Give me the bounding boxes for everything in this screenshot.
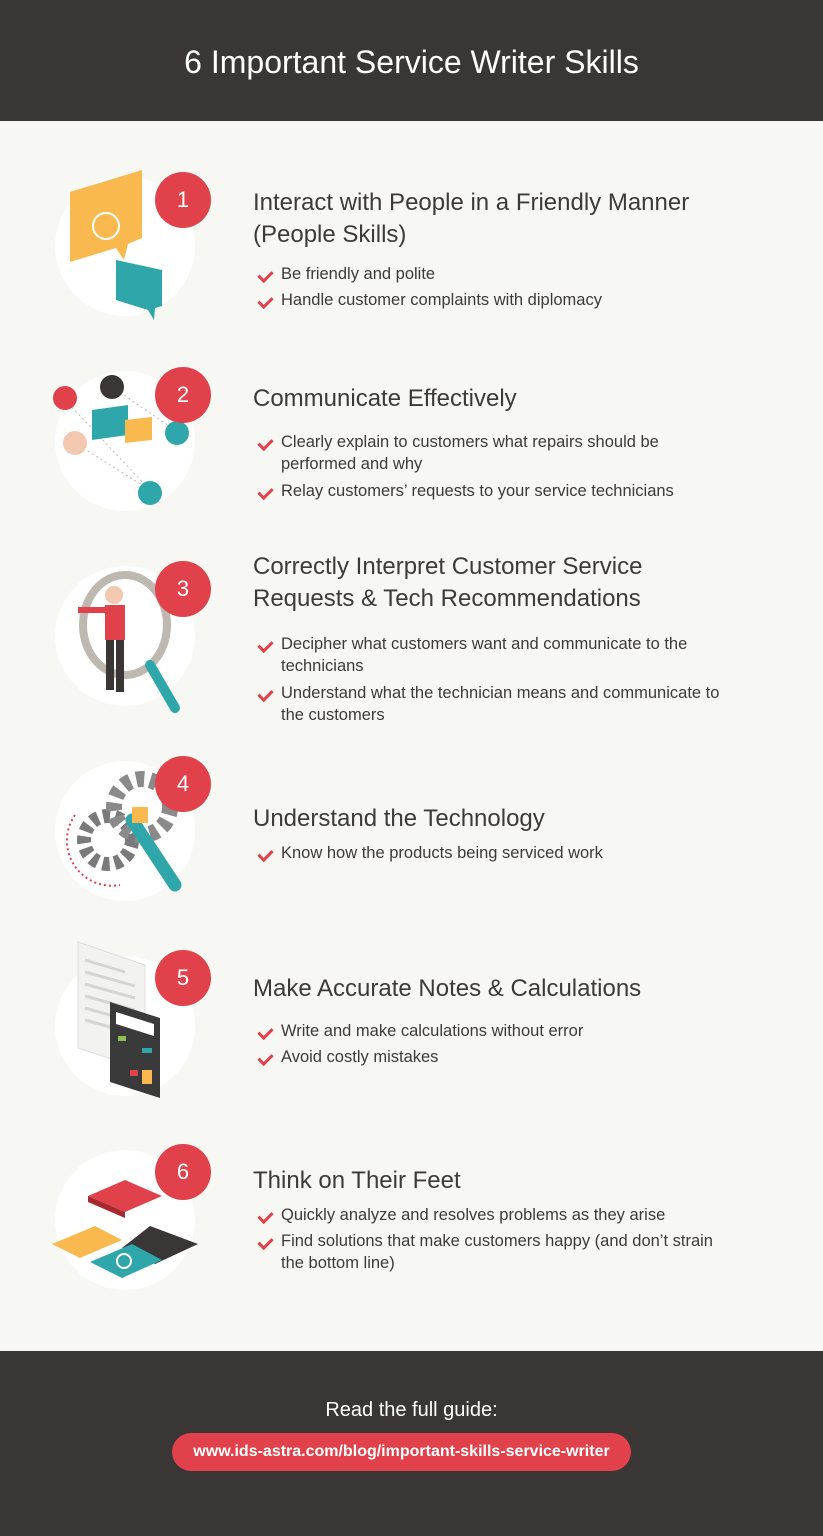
item 4	[55, 756, 211, 901]
bullets 6	[257, 1206, 713, 1272]
footer	[0, 1351, 823, 1536]
link pill	[172, 1433, 631, 1471]
bullets 5: Write and make calculations without error	[281, 1022, 583, 1040]
item 5	[55, 941, 211, 1098]
badge 1: 1	[177, 187, 189, 212]
bullets 3: Decipher what customers want and communicate to the	[281, 635, 687, 653]
bullets 2: Relay customers’ requests to your service technicians	[281, 482, 674, 500]
bullets 6: Quickly analyze and resolves problems as they arise	[281, 1206, 665, 1224]
badge 4	[155, 756, 211, 812]
bullets 1: Be friendly and polite	[281, 265, 435, 283]
title 1: Interact with People in a Friendly Manner	[253, 189, 689, 216]
title 1	[253, 189, 689, 248]
badge 2: 2	[177, 382, 189, 407]
bullets 2: Clearly explain to customers what repairs should be	[281, 433, 659, 451]
item 2	[53, 367, 211, 511]
bullets 1	[257, 265, 602, 310]
bullets 6: the bottom line)	[281, 1254, 395, 1272]
bullets 1: Handle customer complaints with diplomacy	[281, 291, 602, 309]
badge 3: 3	[177, 576, 189, 601]
badge 3	[155, 561, 211, 617]
title 3: Correctly Interpret Customer Service	[253, 553, 642, 580]
badge 6: 6	[177, 1159, 189, 1184]
header	[0, 0, 823, 121]
item 1	[55, 170, 211, 320]
badge 2	[155, 367, 211, 423]
title 1: (People Skills)	[253, 221, 406, 248]
bullets 2	[257, 433, 674, 500]
bullets 6: Find solutions that make customers happy (and don’t strain	[281, 1232, 713, 1250]
bullets 4: Know how the products being serviced work	[281, 844, 603, 862]
title 5: Make Accurate Notes & Calculations	[253, 975, 641, 1002]
icon: notes and calculator	[55, 956, 195, 1096]
title 4: Understand the Technology	[253, 805, 545, 832]
title 6: Think on Their Feet	[253, 1167, 461, 1194]
bullets 3	[257, 635, 719, 724]
bullets 2: performed and why	[281, 455, 422, 473]
bullets 3: the customers	[281, 706, 385, 724]
bullets 3: Understand what the technician means and communicate to	[281, 684, 719, 702]
badge 6	[155, 1144, 211, 1200]
header: 6 Important Service Writer Skills	[184, 44, 639, 80]
icon: chat bubbles	[55, 176, 195, 316]
badge 5	[155, 950, 211, 1006]
title 3	[253, 553, 642, 612]
item 6	[52, 1144, 211, 1290]
link pill: www.ids-astra.com/blog/important-skills-service-writer	[193, 1443, 610, 1460]
badge 4: 4	[177, 771, 189, 796]
item 3	[55, 561, 211, 713]
icon: communication network	[55, 371, 195, 511]
icon: puzzle pieces	[55, 1150, 195, 1290]
footer text: Read the full guide:	[325, 1399, 498, 1421]
icon: magnifier with person	[55, 566, 195, 706]
title 2: Communicate Effectively	[253, 385, 517, 412]
icon: gears and wrench	[55, 761, 195, 901]
bullets 5	[257, 1022, 584, 1066]
badge 5: 5	[177, 965, 189, 990]
bullets 5: Avoid costly mistakes	[281, 1048, 438, 1066]
title 3: Requests & Tech Recommendations	[253, 585, 641, 612]
badge 1	[155, 172, 211, 228]
bullets 3: technicians	[281, 657, 364, 675]
